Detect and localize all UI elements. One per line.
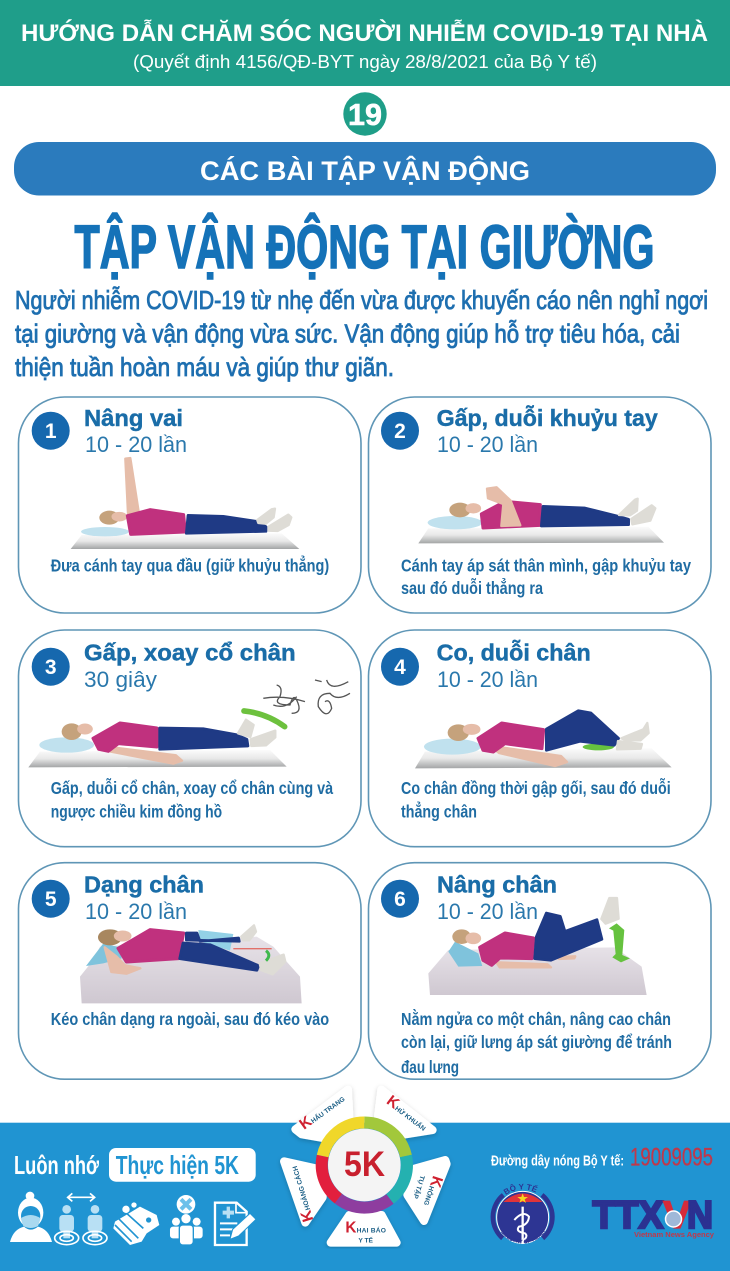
number badge 19	[343, 92, 387, 136]
description 4: thẳng chân	[401, 801, 477, 822]
repetitions 6: 10 - 20 lần	[437, 899, 538, 924]
description 3: ngược chiều kim đồng hồ	[51, 802, 222, 822]
description 2	[401, 556, 691, 598]
badge 2	[381, 412, 419, 450]
repetitions 5: 10 - 20 lần	[85, 899, 187, 924]
hotline	[491, 1144, 713, 1172]
petal: keep distance	[284, 1161, 323, 1224]
hotline: Đường dây nóng Bộ Y tế:	[491, 1154, 624, 1170]
badge 5: 5	[45, 888, 57, 911]
illustration: bending elbows	[418, 487, 664, 543]
description 6: Nằm ngửa co một chân, nâng cao chân	[401, 1008, 671, 1029]
petal: face mask: KHẨU TRANG	[296, 1089, 348, 1133]
description 4: Co chân đồng thời gập gối, sau đó duỗi	[401, 777, 671, 798]
petal: health declaration: Y TẾ	[358, 1234, 374, 1244]
ring	[322, 1122, 407, 1208]
petal: no gathering: TỤ TẬP	[411, 1174, 427, 1201]
heading 6: Nâng chân	[437, 872, 557, 898]
section banner	[14, 142, 716, 196]
panel: exercise 2	[368, 397, 711, 613]
illustration: bending legs	[415, 711, 672, 768]
description 6: đau lưng	[401, 1057, 459, 1077]
icon: face mask	[10, 1192, 52, 1242]
heading 5: Dạng chân	[84, 872, 204, 898]
header title: HƯỚNG DẪN CHĂM SÓC NGƯỜI NHIỄM COVID-19 TẠI NHÀ	[21, 18, 708, 47]
description 6: còn lại, giữ lưng áp sát giường để tránh	[401, 1032, 672, 1052]
description 6	[401, 1008, 672, 1077]
petal: disinfection: KHỬ KHUẨN	[383, 1092, 431, 1134]
repetitions 2: 10 - 20 lần	[437, 432, 538, 457]
description 2: sau đó duỗi thẳng ra	[401, 577, 543, 598]
badge 3	[32, 648, 70, 686]
panel: exercise 1	[18, 397, 361, 613]
badge 6	[381, 880, 419, 918]
footer band	[0, 1123, 730, 1271]
duration 3: 30 giây	[84, 667, 157, 692]
logo: Ministry of Health: MINISTRY OF HEALTH	[500, 1231, 545, 1244]
heading 4: Co, duỗi chân	[437, 639, 591, 666]
header subtitle: (Quyết định 4156/QĐ-BYT ngày 28/8/2021 của Bộ Y tế)	[133, 51, 597, 72]
badge 6: 6	[394, 888, 406, 911]
logo: Ministry of Health	[490, 1184, 555, 1244]
panel: exercise 4	[368, 630, 711, 847]
number badge 19: 19	[348, 97, 382, 132]
reminder label: Luôn nhớ	[14, 1150, 99, 1180]
description 5: Kéo chân dạng ra ngoài, sau đó kéo vào	[51, 1009, 329, 1029]
description 3	[51, 777, 333, 822]
badge 3: 3	[45, 656, 57, 679]
logo: TTXVN	[592, 1194, 714, 1239]
panel: exercise 6	[368, 863, 711, 1079]
heading 1: Nâng vai	[84, 405, 183, 431]
badge 1: 1	[45, 420, 57, 443]
5K label box: Thực hiện 5K	[116, 1150, 239, 1180]
petal: keep distance: KHOẢNG CÁCH	[284, 1164, 317, 1224]
petal: health declaration: KHAI BÁO	[345, 1220, 386, 1237]
5K diagram	[284, 1089, 447, 1244]
repetitions 4: 10 - 20 lần	[437, 667, 538, 692]
illustration: moving leg outwards	[80, 925, 302, 1003]
5K centre	[328, 1129, 401, 1201]
badge 5	[32, 880, 70, 918]
petal: no gathering: KHÔNG	[420, 1174, 446, 1209]
repetitions 1: 10 - 20 lần	[85, 432, 187, 457]
icon: washing hands	[113, 1202, 159, 1245]
intro paragraph	[15, 285, 708, 382]
icon: no gathering	[170, 1195, 203, 1245]
icon: health declaration	[215, 1203, 256, 1245]
petal: health declaration	[331, 1215, 397, 1244]
badge 4	[381, 648, 419, 686]
illustration: raising arms	[71, 458, 299, 549]
icon: 5K prevention pictograms	[10, 1192, 256, 1245]
header band	[0, 0, 730, 86]
section banner: CÁC BÀI TẬP VẬN ĐỘNG	[200, 156, 530, 186]
description 3: Gấp, duỗi cổ chân, xoay cổ chân cùng và	[51, 777, 333, 798]
panel: exercise 3	[18, 630, 361, 847]
illustration: raising leg	[428, 898, 647, 995]
logo: Ministry of Health: BỘ Y TẾ	[503, 1184, 538, 1195]
5K centre: 5K	[344, 1145, 385, 1184]
petal: disinfection	[378, 1090, 433, 1136]
icon: keep distance	[55, 1193, 107, 1245]
intro paragraph: thiện tuần hoàn máu và giúp thư giãn.	[15, 352, 394, 382]
logo: TTXVN: Vietnam News Agency	[634, 1232, 714, 1239]
logo: TTXVN: TTX	[592, 1194, 664, 1237]
description 1: Đưa cánh tay qua đầu (giữ khuỷu thẳng)	[51, 555, 329, 576]
heading 2: Gấp, duỗi khuỷu tay	[437, 404, 658, 431]
logo: TTXVN: N	[687, 1194, 713, 1237]
badge 2: 2	[394, 420, 406, 443]
description 4	[401, 777, 671, 822]
illustration: ankle rotation	[28, 680, 350, 767]
petal: no gathering	[407, 1160, 447, 1221]
badge 4: 4	[394, 656, 406, 679]
panel: exercise 5	[18, 863, 361, 1079]
badge 1	[32, 412, 70, 450]
heading 3: Gấp, xoay cổ chân	[84, 640, 296, 666]
logo: TTXVN: V	[663, 1194, 691, 1237]
